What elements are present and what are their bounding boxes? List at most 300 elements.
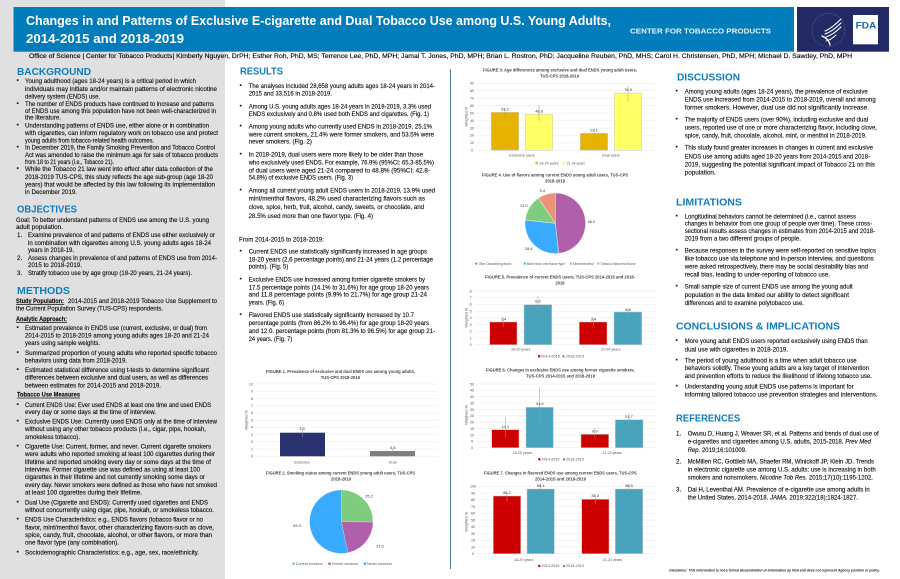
figure 5 values [501,296,631,327]
background bullets: young adults from tobacco-related health outcomes. [25,138,154,145]
reference list: e-cigarettes and cigarettes among U.S. adults, 2015-2018. Prev Med [688,439,872,446]
background bullets: In December 2019, the Family Smoking Prevention and Tobacco Control [25,145,215,152]
study population [16,298,218,313]
analytic approach: behaviors using data from 2018-2019. [25,358,127,365]
tobacco use measures: were adults who reported smoking at least 100 cigarettes during their [24,451,215,458]
reference list: smokers and nonsmokers. Nicotine Tob Res. 2015;17(10):1195-1202. [688,475,873,482]
figure 4 title [482,173,628,184]
figure 7 values: 96.5 [625,483,633,488]
figure 3 legend: 18-20 years [539,161,559,165]
figure 6 axis labels: 50 [470,382,474,386]
tobacco use measures: interview. Former cigarette use was defined as using at least 100 [25,467,201,474]
results changes over time: years. (Fig. 6) [249,299,284,306]
figure 4 value labels: 48.2 [588,219,595,224]
analytic approach: years using sample weights. [25,340,100,347]
background bullets: While the Tobacco 21 law went into effect after data collection of the [25,166,214,173]
title [26,14,611,46]
results findings for 2018-2019: ▪ [240,102,242,109]
figure 2 title: 2018-2019 [331,476,351,481]
tobacco use measures: Sociodemographic Characteristics: e.g., age, sex, race/ethnicity. [25,550,199,557]
figure 7 legend: 2018-2019 [566,564,584,568]
background bullets: of ENDS use among this population have not been well-characterized in [25,108,217,115]
results changes over time: ▪ [240,275,242,282]
background bullets: from 18 to 21 years (i.e., Tobacco 21). [25,159,114,166]
figure 7 axis labels: 0 [472,552,474,556]
figure 2 pie slices [310,490,373,553]
figure 6 legend [538,458,584,462]
panel: methods [16,285,218,557]
discussion bullets: This study found greater increases in changes in current and exclusive [685,145,874,152]
figure 1 axis labels: Weighted % [244,409,248,430]
objectives text: Assess changes in prevalence of and patterns of ENDS use from 2014- [28,255,217,262]
figure 7 values [503,483,633,504]
figure 2 value labels: 25.2 [365,494,373,498]
panel: conclusions and implications [676,321,878,399]
results changes over time: 18-20 years (2.6 percentage points) and 21-24 years (1.2 percentage [249,256,434,263]
results changes over time: Current ENDS use statistically significantly increased in age groups [249,248,427,255]
objectives text [16,217,217,277]
limitations bullets: ▪ [676,247,678,254]
background bullets: Understanding patterns of ENDS use, either alone or in combination [25,123,210,130]
tobacco use measures [16,392,218,557]
figure 5 values: 3.4 [501,316,507,322]
figure 6 axis labels: 18-20 years [513,451,532,455]
figure 7 bars [493,489,643,554]
figure 4 legend: Mint/menthol [573,262,594,266]
figure 3 axis labels: 80 [470,89,474,93]
analytic approach [16,316,218,390]
limitations bullets: population in the data limited our ability to detect significant [685,292,849,299]
figure 5 values: 4.8 [625,307,631,312]
figure 2 legend [292,562,392,566]
results findings for 2018-2019: Among all current young adult ENDS users in 2018-2019, 13.9% used [249,187,436,194]
title banner [14,7,794,52]
analytic approach: Analytic Approach: [16,316,67,323]
panel: results [239,66,436,343]
background bullets: ▪ [16,100,19,107]
tobacco use measures: cigarettes in their lifetime and not currently smoking some days or [25,474,205,481]
figure 3 axis labels: Dual users [602,154,620,158]
conclusions bullets [676,337,878,399]
reference list: 2. [676,459,681,466]
figure 3 axis labels: Exclusive users [509,154,535,158]
disclaimer: Disclaimer: This information is not a formal dissemination of information by FDA and does not represent Agency position or policy. [669,569,880,573]
figure 2 value labels: 53.3 [293,523,301,528]
figure 3 axis labels: 60 [470,104,474,108]
figure 2 legend: Never smokers [367,562,392,566]
analytic approach: Summarized proportion of young adults who reported specific tobacco [25,350,218,357]
reference list: Owusu D, Huang J, Weaver SR, et al. Patterns and trends of dual use of [688,431,879,438]
column divider [450,69,452,569]
figure 5 axis labels: 18-20 years [511,348,531,352]
discussion bullets: users, reported use of one or more characterizing flavor, including clove, [685,125,877,132]
reference list: in electronic cigarette use among U.S. adults: use is increasing in both [688,467,876,474]
figure 6 axis labels: Weighted % [464,404,468,425]
tobacco use measures: every day or some days at the time of interview. [25,409,156,416]
heading: background: BACKGROUND [17,66,91,78]
limitations bullets: ▪ [676,213,678,220]
analytic approach: Estimated prevalence in ENDS use (current, exclusive, or dual) from [25,325,207,332]
results changes over time: 17.5 percentage points (14.1% to 31.6%) for age group 18-20 years [249,284,429,291]
background bullets: 2018-2019 TUS-CPS, this study reflects the age sub-group (age 18-20 [25,174,214,181]
study population: Study Population: [16,298,64,305]
figure 5 legend [538,354,584,358]
background bullets: in December 2019. [25,189,77,196]
study population: the Current Population Survey (TUS-CPS) respondents. [16,306,163,313]
conclusions bullets: informing tailored tobacco use prevention strategies and interventions. [685,392,878,399]
tobacco use measures: Current ENDS Use: Ever used ENDS at least one time and used ENDS [25,402,211,409]
figure 5 title: 2019 [556,281,565,286]
figure 7 axis labels: 20 [471,538,475,542]
figure 7 axis labels: 50 [471,518,475,522]
figure 3 axis labels: 70 [470,96,474,100]
figure 6 title: FIGURE 6. Changes in exclusive ENDS use among former cigarette smokers, [486,367,635,372]
figure 5 values: 6.0 [535,298,542,304]
heading: discussion: DISCUSSION [677,72,740,84]
results changes over time: percentage points (from 86.2% to 96.4%) for age group 18-20 years [249,320,429,327]
background bullets: ▪ [16,77,19,84]
results findings for 2018-2019: were current smokers, 21.4% were former smokers, and 53.5% were [248,131,435,138]
figure 3 axis labels: 20 [470,134,474,138]
figure 6 bars [492,407,643,448]
figure 1 axis labels: 8 [251,397,253,401]
figure 3 title: TUS-CPS 2018-2019 [540,74,579,79]
figure 3 values: 48.8 [535,108,543,114]
tobacco use measures: Dual Use (Cigarette and ENDS): Currently used cigarettes and ENDS [25,500,208,507]
figure 7 title [484,470,637,482]
results changes over time [239,236,435,343]
results findings for 2018-2019: The analyses included 28,658 young adults ages 18-24 years in 2014- [249,83,435,90]
limitations bullets: like tobacco use via telephone and in-person interview, and questions [685,256,874,263]
results findings for 2018-2019: who exclusively used ENDS. For example, 76.9% (95%CI: 65.3-85.5%) [248,160,434,167]
heading: results: RESULTS [240,66,283,78]
conclusions bullets: behaviors solidify. These young adults are a key target of intervention [685,365,870,372]
title: 2014-2015 and 2018-2019 [26,32,184,46]
results findings for 2018-2019: ENDS exclusively and 0.8% used both ENDS and cigarettes. (Fig. 1) [249,111,429,118]
background bullets: individuals may initiate and/or maintain patterns of electronic nicotine [25,86,218,93]
figure 7 values: 96.4 [537,483,545,488]
figure 4 legend: More than one flavor type [527,262,565,266]
tobacco use measures: at least 100 cigarettes during their lifetime. [25,490,142,497]
figure 3 axis labels: 40 [470,119,474,123]
figure 2 legend: Former smokers [332,562,358,566]
reference list: the United States, 2014-2018. JAMA. 2019;322(18):1824-1827. [688,495,858,502]
figure 6 axis labels: 21-24 years [602,451,622,455]
analytic approach: ▪ [16,349,19,356]
figure 4 legend [475,262,637,266]
study population: 2014-2015 and 2018-2019 Tobacco Use Supplement to [68,298,218,305]
figure 5 axis labels: 2 [470,330,472,334]
results findings for 2018-2019: ▪ [240,122,242,129]
figure 6 values [502,387,633,438]
authors line: Office of Science | Center for Tobacco Products| Kimberly Nguyen, DrPH; Esther Roh, PhD, MS; Terrence Lee, PhD, MPH; Jamal T. Jones, PhD, MPH; Brian L. Rostron, PhD; Jacqueline Reuben, PhD, MHS; Carol H. Christensen, PhD, MPH; Michael D. Sawdey, PhD, MPH [29,53,852,60]
figure 3 legend [536,161,585,165]
results changes over time: Flavored ENDS use statistically significantly increased by 10.7 [249,312,415,319]
figure 2 legend: Current smokers [296,562,323,566]
limitations bullets: Longitudinal behaviors cannot be determined (i.e., cannot assess [685,214,856,221]
figure 6 axis labels: 30 [470,408,474,412]
figure 6 axis labels: 25 [470,414,474,418]
limitations bullets: Because responses in the survey were self-reported on sensitive topics [685,248,876,255]
limitations bullets: ▪ [676,283,678,290]
figure 1 axis labels: 1 [251,447,253,451]
results findings for 2018-2019: ▪ [240,186,242,193]
discussion bullets: former smokers. However, dual use did not significantly increase. [685,105,869,112]
chart: figure 6 [464,367,657,462]
figure 4 value labels: 13.9 [520,203,527,208]
tobacco use measures: lifetime and reported smoking every day or some days at the time of [25,459,211,466]
tobacco use measures: Exclusive ENDS Use: Currently used ENDS only at the time of interview [25,419,218,426]
figure 5 axis labels: 1 [470,336,472,340]
chart: figure 4 pie [475,173,637,266]
analytic approach: Estimated statistical difference using t-tests to determine significant [25,367,209,374]
background bullets: ▪ [16,122,19,128]
figure 2 title: FIGURE 2. Smoking status among current ENDS young adult users, TUS-CPS [266,470,415,475]
figure 6 title: TUS-CPS 2014-2015 and 2018-2019 [526,374,595,379]
results findings for 2018-2019: mint/menthol flavors, 48.2% used characterizing flavors such as [249,195,425,202]
figure 6 legend: 2018-2019 [566,458,584,462]
discussion bullets: Among young adults (ages 18-24 years), the prevalence of exclusive [685,89,868,96]
heading: limitations: LIMITATIONS [676,196,742,208]
figure 1 axis labels [244,382,397,465]
figure 7 axis labels: 80 [471,498,475,502]
results changes over time: ▪ [240,247,242,254]
figure 3 axis labels: 90 [470,82,474,86]
figure 3 axis labels: Weighted % [464,106,468,127]
tobacco use measures: without concurrently using cigar, pipe, hookah, or smokeless tobacco. [24,507,214,514]
chart: figure 1 [244,369,438,465]
figure 6 axis labels: 20 [470,420,474,424]
figure 3 legend: 21-24 years [567,161,585,165]
discussion bullets: spice, candy, fruit, chocolate, alcohol, mint, or menthol in 2018-2019. [685,133,867,140]
objectives text: Goal: To better understand patterns of ENDS use among the U.S. young [16,217,210,224]
analytic approach: differences between exclusive and dual users, as well as differences [25,375,208,382]
figure 6 axis labels [464,382,622,455]
tobacco use measures: smokeless tobacco). [25,434,80,441]
chart: figure 5 [464,274,657,358]
tobacco use measures: without using any other tobacco products (i.e., cigar, pipe, hookah, [24,426,206,433]
figure 5 axis labels: 3 [470,323,472,327]
figure 1 axis labels: 7 [251,404,253,408]
figure 5 axis labels: 5 [470,309,472,313]
figure 4 pie slices [525,193,586,254]
title: Changes in and Patterns of Exclusive E-cigarette and Dual Tobacco Use among U.S. Young Adults, [26,14,611,28]
chart: figure 7 [464,470,657,568]
results changes over time: ▪ [240,311,242,318]
figure 7 axis labels: 21-24 years [603,558,622,562]
figure 3 values [501,86,632,138]
figure 7 axis labels: 10 [471,545,475,549]
figure 3 axis labels [464,82,620,158]
conclusions bullets: ▪ [676,383,678,390]
figure 6 axis labels: 45 [470,389,474,393]
objectives text: adult population. [16,224,63,231]
results findings for 2018-2019: ▪ [240,82,242,89]
results changes over time: and 12.0. percentage points (from 81.3% to 96.5%) for age group 21- [249,328,435,335]
limitations bullets: Small sample size of current ENDS use among the young adult [685,284,853,291]
analytic approach: between estimates for 2014-2015 and 2018-2019. [25,383,161,390]
figure 1 bars: 0.8 [390,445,395,450]
reference list: Dai H, Leventhal AM. Prevalence of e-cigarette use among adults in [688,487,870,494]
figure 5 values: 3.4 [591,316,597,322]
figure 3 axis labels: 30 [470,126,474,130]
figure 5 title [485,274,635,286]
reference list: Rep. 2019;16:101009. [688,447,747,454]
figure 3 axis labels: 0 [471,149,473,153]
figure 3 values: 76.9 [624,87,632,92]
figure 4 legend: Tobacco flavor/no flavor [600,262,637,266]
icon: HHS eagle seal [812,14,845,46]
heading: references: REFERENCES [676,413,740,425]
discussion bullets: 2019, suggesting the potential significant impact of Tobacco 21 on this [685,161,875,168]
objectives text: 3. [17,270,22,277]
limitations bullets [676,213,876,307]
chart: figure 3 [464,68,655,165]
background bullets: Act was amended to raise the minimum age for sale of tobacco products [25,152,218,159]
figure 4 title: FIGURE 4. Use of flavors among current ENDS young adult users, TUS-CPS [482,173,628,178]
figure 3 title: FIGURE 3. Age differences among exclusive and dual ENDS young adult users, [483,68,637,73]
figure 7 axis labels: 100 [470,485,476,489]
analytic approach: ▪ [16,366,19,373]
figure 6 axis labels: 5 [471,440,473,444]
analytic approach: 2014-2015 to 2018-2019 among young adults ages 18-20 and 21-24 [25,333,210,340]
panel: discussion [676,72,877,177]
tobacco use measures: spice, candy, fruit, chocolate, alcohol, or other flavors, or more than [25,532,213,539]
figure 7 axis labels: 60 [471,512,475,516]
figure 4 value labels: 28.5 [525,246,532,251]
figure 5 legend: 2018-2019 [566,354,584,358]
figure 7 axis labels: 30 [471,532,475,536]
discussion bullets [676,88,877,177]
results changes over time: 24 years. (Fig. 7) [249,336,292,343]
background bullets: the literature. [25,115,61,122]
figure 7 axis labels: Weighted % [464,511,468,532]
limitations bullets: differences and to examine polytobacco use. [685,300,804,307]
chart: figure 2 pie [266,470,415,566]
figure 3 axis labels: 50 [470,111,474,115]
figure 6 axis labels: 0 [471,446,473,450]
background bullets: Young adulthood (ages 18-24 years) is a critical period in which [25,78,197,85]
figure 5 axis labels: 0 [470,343,472,347]
figure 7 title: 2014-2015 and 2018-2019 [535,477,586,482]
figure 5 bars [490,305,642,345]
conclusions bullets: More young adult ENDS users reported exclusively using ENDS than [685,338,868,345]
figure 1 title: FIGURE 1. Prevalence of exclusive and dual ENDS use among young adults, [266,369,415,374]
analytic approach: ▪ [16,324,19,331]
figure 7 values: 81.3 [592,493,599,498]
figure 6 title [486,367,635,379]
figure 3 title [483,68,637,79]
tobacco use measures: ▪ [16,401,19,408]
figure 7 axis labels: 40 [471,525,475,529]
panel: background [16,66,218,196]
figure 6 values: 9.9 [592,428,598,434]
background bullets: ▪ [16,144,19,150]
limitations bullets: recall bias, leading to under-reporting of tobacco use. [685,272,830,279]
figure 4 value labels: 9.4 [540,188,546,193]
figure 7 axis labels: 70 [471,505,475,509]
results changes over time: From 2014-2015 to 2018-2019: [239,236,324,243]
figure 7 axis labels: 18-20 years [514,558,534,562]
background bullets: years) that would be affected by this law following its implementation [25,182,216,189]
reference list: 3. [676,487,681,494]
heading: objectives: OBJECTIVES [17,204,77,216]
reference list [676,431,879,502]
results findings for 2018-2019: 28.5% used more than one flavor type. (Fig. 4) [249,213,373,220]
figure 1 axis labels: Exclusive [294,461,310,465]
figure 3 axis labels: 10 [470,141,474,145]
results changes over time: Exclusive ENDS use increased among former cigarette smokers by [249,276,426,283]
conclusions bullets: Understanding young adult ENDS use patterns is important for [685,384,854,391]
figure 6 values: 21.7 [625,414,633,419]
figure 5 axis labels: 8 [470,289,472,293]
figure 4 legend: Other Characterizing flavors [479,262,512,266]
results findings for 2018-2019: of dual users were aged 21-24 compared to 48.8% (95%CI: 42.8- [249,167,430,174]
figure 3 values: 51.2 [501,106,509,112]
limitations bullets: 2019 from a two different groups of people. [685,236,801,243]
figure 6 axis labels: 35 [470,401,474,405]
discussion bullets: ENDS use increased from 2014-2015 to 2018-2019, overall and among [685,97,876,104]
objectives text: Examine prevalence of and patterns of ENDS use either exclusively or [28,232,215,239]
heading: methods: METHODS [17,285,70,297]
center name: CENTER FOR TOBACCO PRODUCTS [630,26,771,36]
figure 1 axis labels: 9 [251,390,253,394]
results findings for 2018-2019: clove, spice, herb, fruit, alcohol, candy, sweets, or chocolate, and [249,204,425,211]
results findings for 2018-2019: 54.8%) of exclusive ENDS users. (Fig. 3) [249,175,353,182]
figure 6 axis labels: 15 [470,427,474,431]
figure 7 legend [538,564,584,568]
figure 6 values: 31.6 [536,401,543,406]
results changes over time: points). (Fig. 5) [249,264,288,271]
reference list: 1. [676,431,681,438]
figure 1 axis labels: 6 [251,411,253,415]
figure 1 bars [280,426,415,456]
tobacco use measures: flavor, mint/menthol flavor, other characterizing flavors-such as clove, [25,525,214,532]
discussion bullets: ENDS use among adults aged 18-20 years from 2014-2015 and 2018- [685,153,870,160]
discussion bullets: ▪ [676,116,678,123]
discussion bullets: population. [685,170,716,177]
figure 1 bars: 3.3 [299,426,305,431]
tobacco use measures: ▪ [16,418,19,425]
limitations bullets: were asked retrospectively, there may be social desirability bias and [684,264,869,271]
objectives text: in combination with cigarettes among U.S. young adults ages 18-24 [28,240,212,247]
conclusions bullets: The period of young adulthood is a time when adult tobacco use [685,358,857,365]
figure 1 axis labels: 2 [251,440,253,444]
conclusions bullets: and prevention efforts to reduce the likelihood of lifelong tobacco use. [685,373,872,380]
figure 7 legend: 2014-2015 [542,564,559,568]
results findings for 2018-2019: ▪ [240,151,242,158]
figure 7 axis labels: 90 [471,491,475,495]
background bullets: delivery system (ENDS) use. [25,93,100,100]
tobacco use measures: Tobacco Use Measures [17,392,81,399]
conclusions bullets: ▪ [676,357,678,364]
figure 5 legend: 2014-2015 [541,354,560,358]
objectives text: 1. [17,232,22,239]
tobacco use measures: one flavor type (any combination). [25,540,119,547]
figure 1 axis labels: 3 [251,433,253,437]
figure 1 axis labels: 10 [249,382,253,386]
figure 5 axis labels: 4 [470,316,472,320]
tobacco use measures: ▪ [16,549,19,556]
figure 6 legend: 2014-2015 [542,458,559,462]
icon: FDA logo: FDA [856,20,876,32]
figure 2 value labels [293,494,384,548]
objectives text: 2015 to 2018-2019. [28,262,82,269]
figure 6 values: 14.1 [502,424,509,429]
left column background panel [0,0,225,579]
results findings for 2018-2019: In 2018-2019, dual users were more likely to be older than those [249,152,424,159]
objectives text: 2. [17,255,22,262]
